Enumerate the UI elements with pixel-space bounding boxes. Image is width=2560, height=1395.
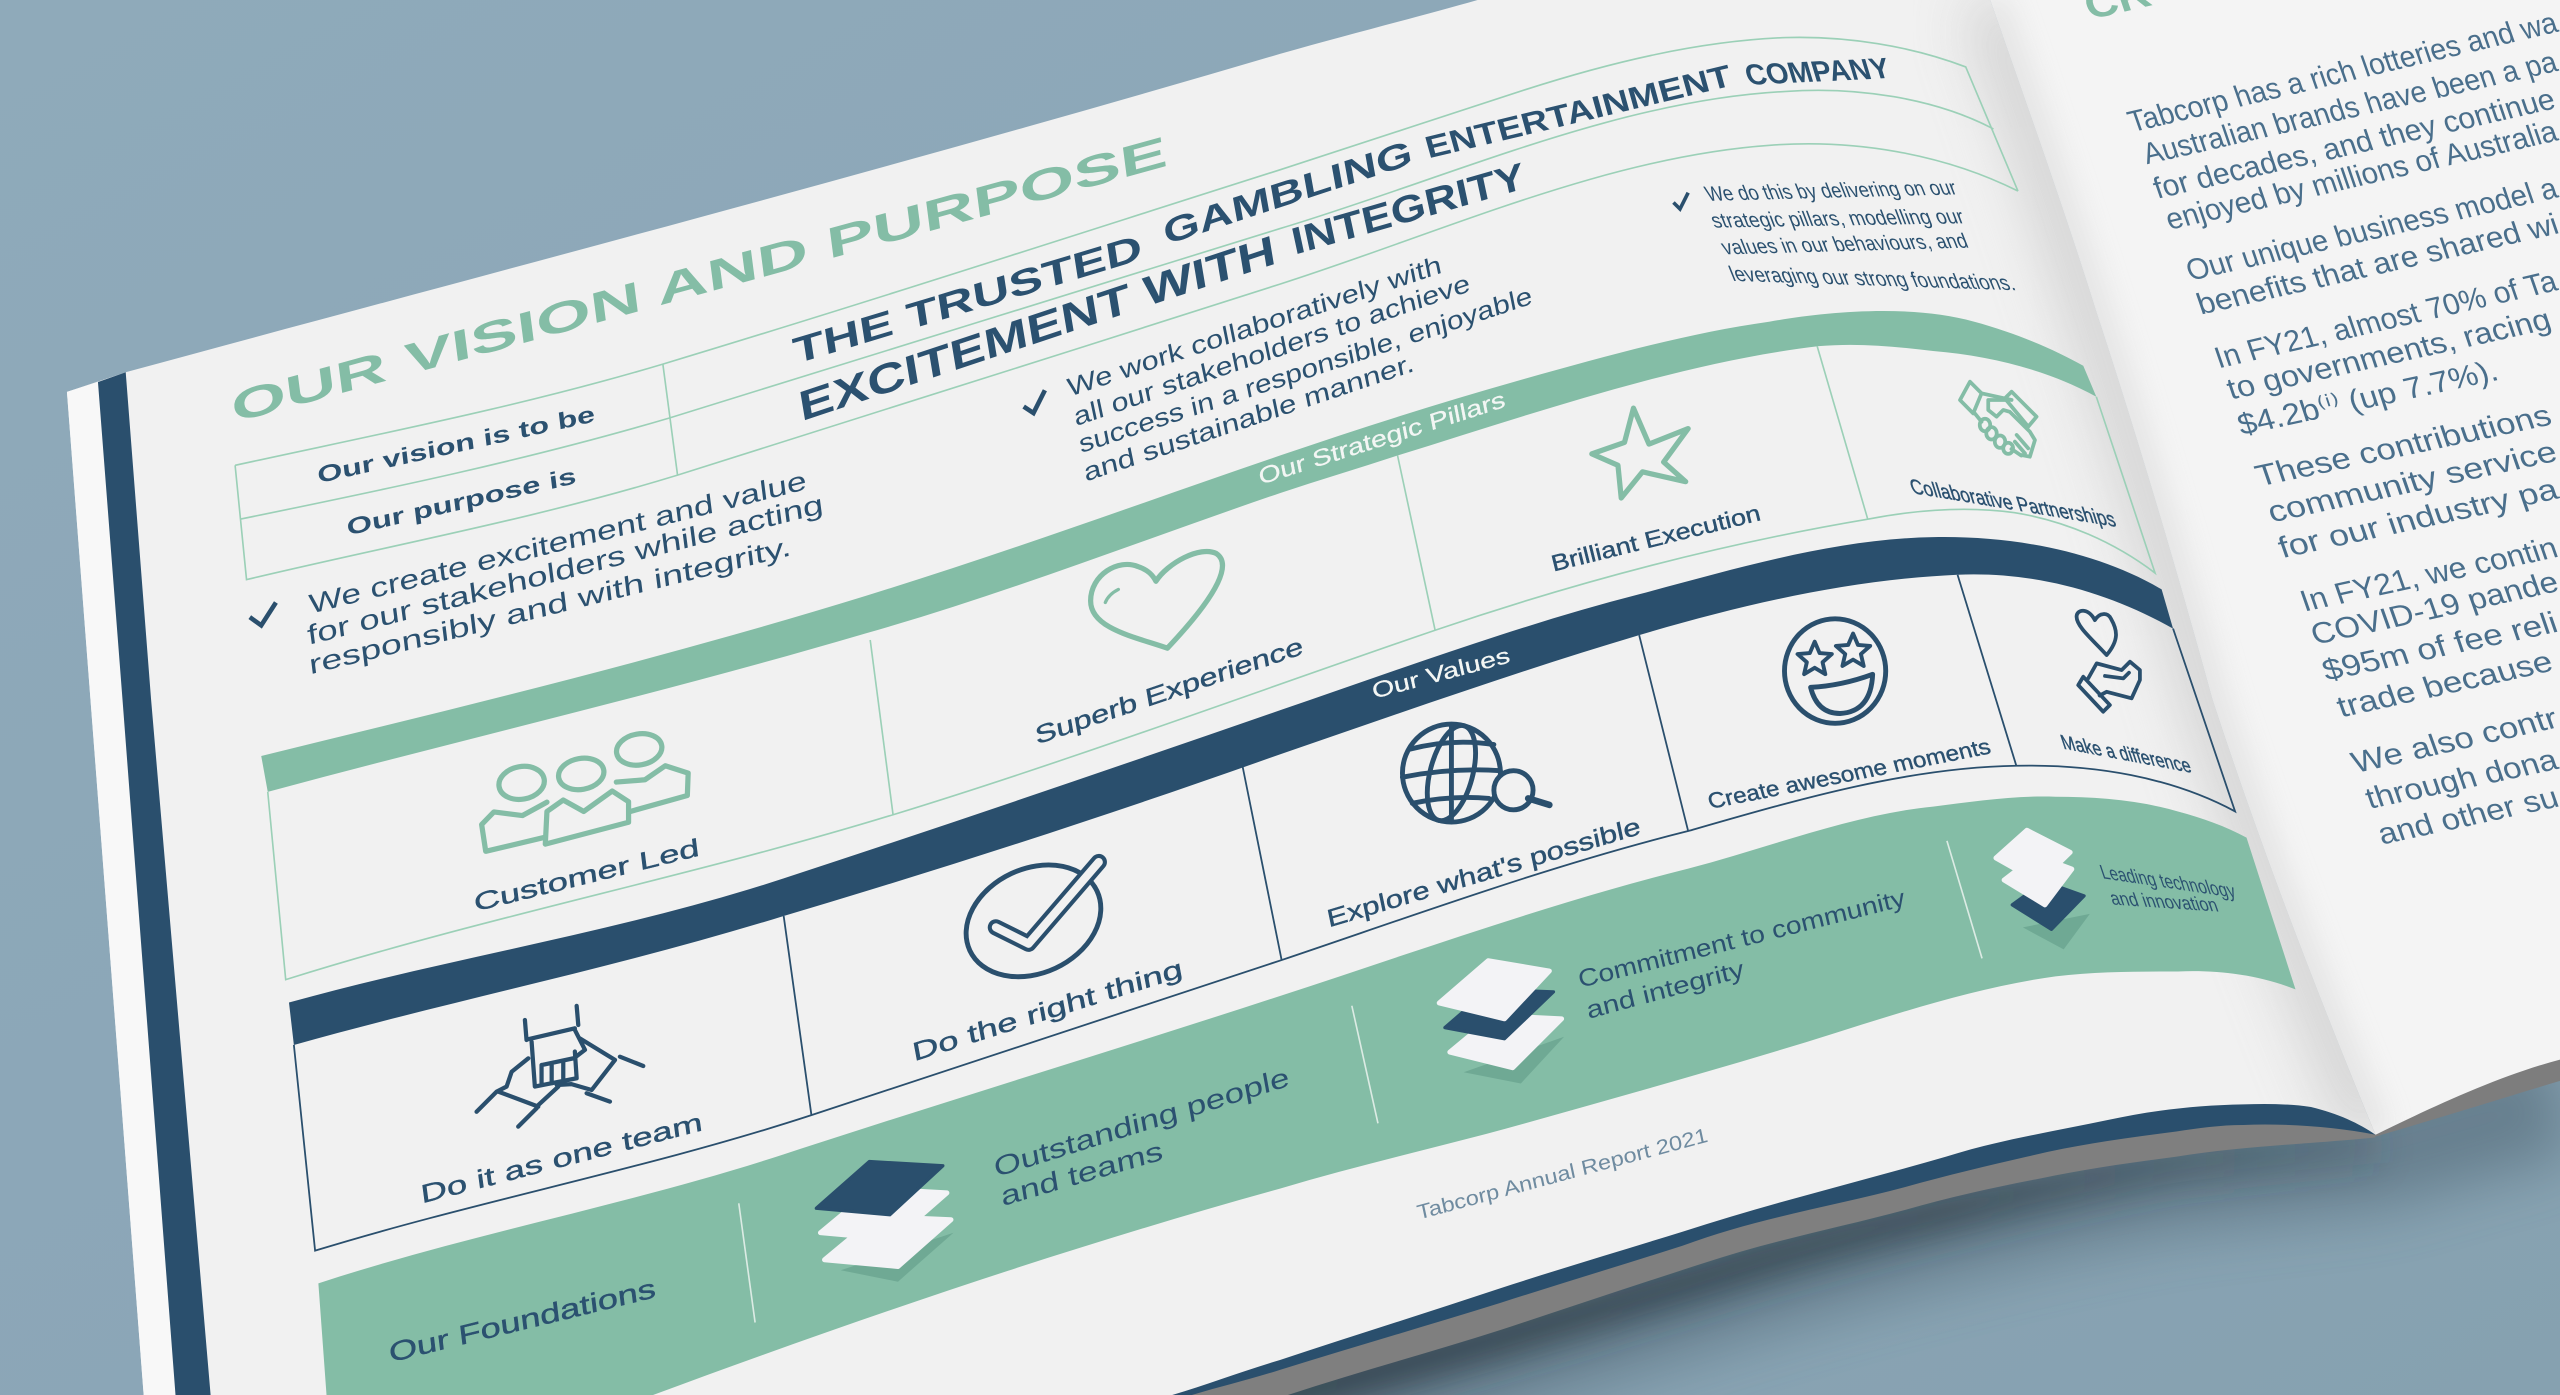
icon: layers navy bottom bbox=[1996, 830, 2090, 949]
pillars heading band bbox=[261, 311, 2096, 792]
right page paper edge bbox=[2371, 1045, 2560, 1138]
vision statement: COMPANY bbox=[1741, 53, 1894, 92]
footer text: Tabcorp Annual Report 2021 bbox=[1415, 1125, 1710, 1225]
value: do it as one team bbox=[419, 1006, 704, 1209]
panel: foundations bbox=[318, 797, 2296, 1395]
panel: values bbox=[289, 537, 2235, 1251]
text block: delivering on pillars: leveraging our strong foundations. bbox=[1725, 261, 2019, 295]
text block: work collaboratively: success in a responsible, enjoyable bbox=[1076, 282, 1535, 459]
values heading: Our Values bbox=[1370, 642, 1512, 704]
left page white margin bbox=[67, 382, 176, 1395]
purpose statement bbox=[796, 154, 1529, 430]
text block: delivering on pillars: We do this by delivering on our bbox=[1701, 175, 1960, 206]
right page sheet bbox=[1990, 0, 2560, 1135]
book shadow bbox=[1143, 1097, 2560, 1395]
paper edge bbox=[1143, 980, 2376, 1395]
value: make a difference: Make a difference bbox=[2058, 731, 2194, 778]
pillar: brilliant execution: Brilliant Execution bbox=[1548, 499, 1763, 576]
foundation: outstanding people: and teams bbox=[999, 1135, 1165, 1212]
foundations band bbox=[318, 797, 2296, 1395]
panel: vision and purpose table bbox=[235, 37, 2018, 580]
icon: tick bbox=[250, 602, 276, 625]
pillars frame bbox=[268, 346, 2155, 980]
pillar: collaborative partnerships: Collaborative Partnerships bbox=[1907, 475, 2119, 532]
panel: left page block edge bbox=[1143, 980, 2376, 1395]
foundation: outstanding people: Outstanding people bbox=[992, 1062, 1292, 1183]
foundations heading: Our Foundations bbox=[387, 1273, 657, 1368]
text block: excitement and value bbox=[250, 465, 825, 680]
foundation: outstanding people bbox=[816, 1062, 1292, 1282]
right page body text: through dona bbox=[2361, 744, 2560, 815]
right page body text: benefits that are shared wi bbox=[2192, 208, 2560, 321]
foundation: commitment to community: and integrity bbox=[1584, 956, 1748, 1025]
pillar: brilliant execution bbox=[1548, 408, 1763, 576]
values frame bbox=[294, 575, 2235, 1251]
right page body text: COVID-19 pande bbox=[2306, 566, 2560, 652]
text block: excitement and value: We create excitement and value bbox=[307, 465, 808, 620]
text block: excitement and value: responsibly and with integrity. bbox=[307, 531, 793, 680]
value: do the right thing bbox=[910, 844, 1185, 1067]
values heading band bbox=[289, 537, 2173, 1045]
foundation: leading technology bbox=[1996, 830, 2239, 949]
vision statement: THE TRUSTED bbox=[790, 226, 1145, 372]
text block: work collaboratively: all our stakeholders to achieve bbox=[1071, 269, 1473, 432]
icon: joined hands bbox=[477, 1006, 643, 1127]
label: our purpose: Our purpose is bbox=[345, 462, 578, 541]
pillar: superb experience: Superb Experience bbox=[1033, 633, 1305, 750]
right page body text: We also contr bbox=[2347, 702, 2560, 780]
text block: work collaboratively: and sustainable manner. bbox=[1081, 349, 1417, 488]
text block: work collaboratively bbox=[1024, 251, 1535, 488]
icon: handshake bbox=[1960, 382, 2037, 457]
purpose statement: INTEGRITY bbox=[1288, 154, 1529, 263]
icon: tick bbox=[1024, 390, 1045, 413]
table outlines bbox=[235, 37, 2018, 580]
text block: work collaboratively: We work collaboratively with bbox=[1065, 251, 1444, 403]
icon: globe and magnifier bbox=[1402, 720, 1549, 826]
right page body text: These contributions bbox=[2251, 399, 2556, 493]
text block: excitement and value: for our stakeholders while acting bbox=[305, 489, 825, 651]
left page gutter shading bbox=[1990, 0, 2376, 1135]
pillar: customer led bbox=[473, 730, 701, 918]
foundation: commitment to community: Commitment to community bbox=[1576, 885, 1909, 994]
icon: heart in hand bbox=[2077, 611, 2140, 712]
pillar: customer led: Customer Led bbox=[473, 835, 701, 918]
vision statement: ENTERTAINMENT bbox=[1421, 58, 1735, 165]
icon: people bbox=[482, 730, 688, 851]
panel: right page bbox=[1990, 0, 2560, 1138]
right page gutter shading bbox=[1990, 0, 2376, 1135]
vision statement: GAMBLING bbox=[1160, 134, 1415, 253]
right page body text: for our industry pa bbox=[2274, 473, 2560, 565]
vision statement bbox=[790, 53, 1894, 372]
foundation: leading technology: and innovation bbox=[2107, 888, 2221, 917]
purpose statement: EXCITEMENT WITH bbox=[796, 226, 1279, 430]
title: OUR VISION AND PURPOSE bbox=[229, 127, 1170, 433]
text block: delivering on pillars bbox=[1673, 175, 2019, 295]
right page body text: trade because bbox=[2333, 645, 2557, 724]
right page body text bbox=[2124, 7, 2560, 851]
pillars heading: Our Strategic Pillars bbox=[1256, 386, 1507, 490]
icon: heart bbox=[1091, 551, 1222, 648]
foundation: leading technology: Leading technology bbox=[2097, 861, 2239, 903]
icon: tick in circle bbox=[948, 844, 1119, 998]
navy cover edge bbox=[1143, 980, 2376, 1395]
right page body text: $4.2b⁽ⁱ⁾ (up 7.7%). bbox=[2233, 355, 2502, 442]
right page body text: to governments, racing bbox=[2223, 303, 2555, 406]
value: explore what's possible bbox=[1325, 720, 1643, 933]
icon: tick bbox=[1673, 193, 1688, 209]
icon: layers navy top bbox=[816, 1162, 953, 1282]
text block: delivering on pillars: strategic pillars, modelling our bbox=[1707, 204, 1968, 232]
panel: strategic pillars bbox=[261, 311, 2155, 980]
value: do the right thing: Do the right thing bbox=[910, 955, 1185, 1067]
pillar: superb experience bbox=[1033, 551, 1305, 750]
right page body text: and other su bbox=[2373, 781, 2560, 851]
value: create awesome moments bbox=[1705, 619, 1993, 814]
right page body text: $95m of fee reli bbox=[2318, 607, 2560, 687]
right page body text: for decades, and they continue bbox=[2149, 83, 2559, 205]
right page body text: community service bbox=[2263, 436, 2560, 529]
value: make a difference bbox=[2058, 611, 2194, 778]
text block: delivering on pillars: values in our behaviours, and bbox=[1717, 228, 1972, 259]
value: create awesome moments: Create awesome moments bbox=[1705, 734, 1993, 814]
pillar: collaborative partnerships bbox=[1907, 382, 2119, 532]
right page body text: In FY21, we contin bbox=[2296, 532, 2560, 618]
foundation dividers bbox=[739, 841, 1982, 1323]
navy spine stripe bbox=[98, 372, 211, 1395]
icon: star eyes face bbox=[1784, 619, 1886, 723]
icon: star bbox=[1592, 408, 1688, 498]
label: our vision: Our vision is to be bbox=[316, 400, 596, 488]
icon: layers navy middle bbox=[1439, 961, 1564, 1083]
value: explore what's possible: Explore what's possible bbox=[1325, 813, 1643, 933]
right page body text: In FY21, almost 70% of Ta bbox=[2210, 265, 2560, 375]
foundation: commitment to community bbox=[1439, 885, 1909, 1083]
value: do it as one team: Do it as one team bbox=[419, 1108, 704, 1209]
